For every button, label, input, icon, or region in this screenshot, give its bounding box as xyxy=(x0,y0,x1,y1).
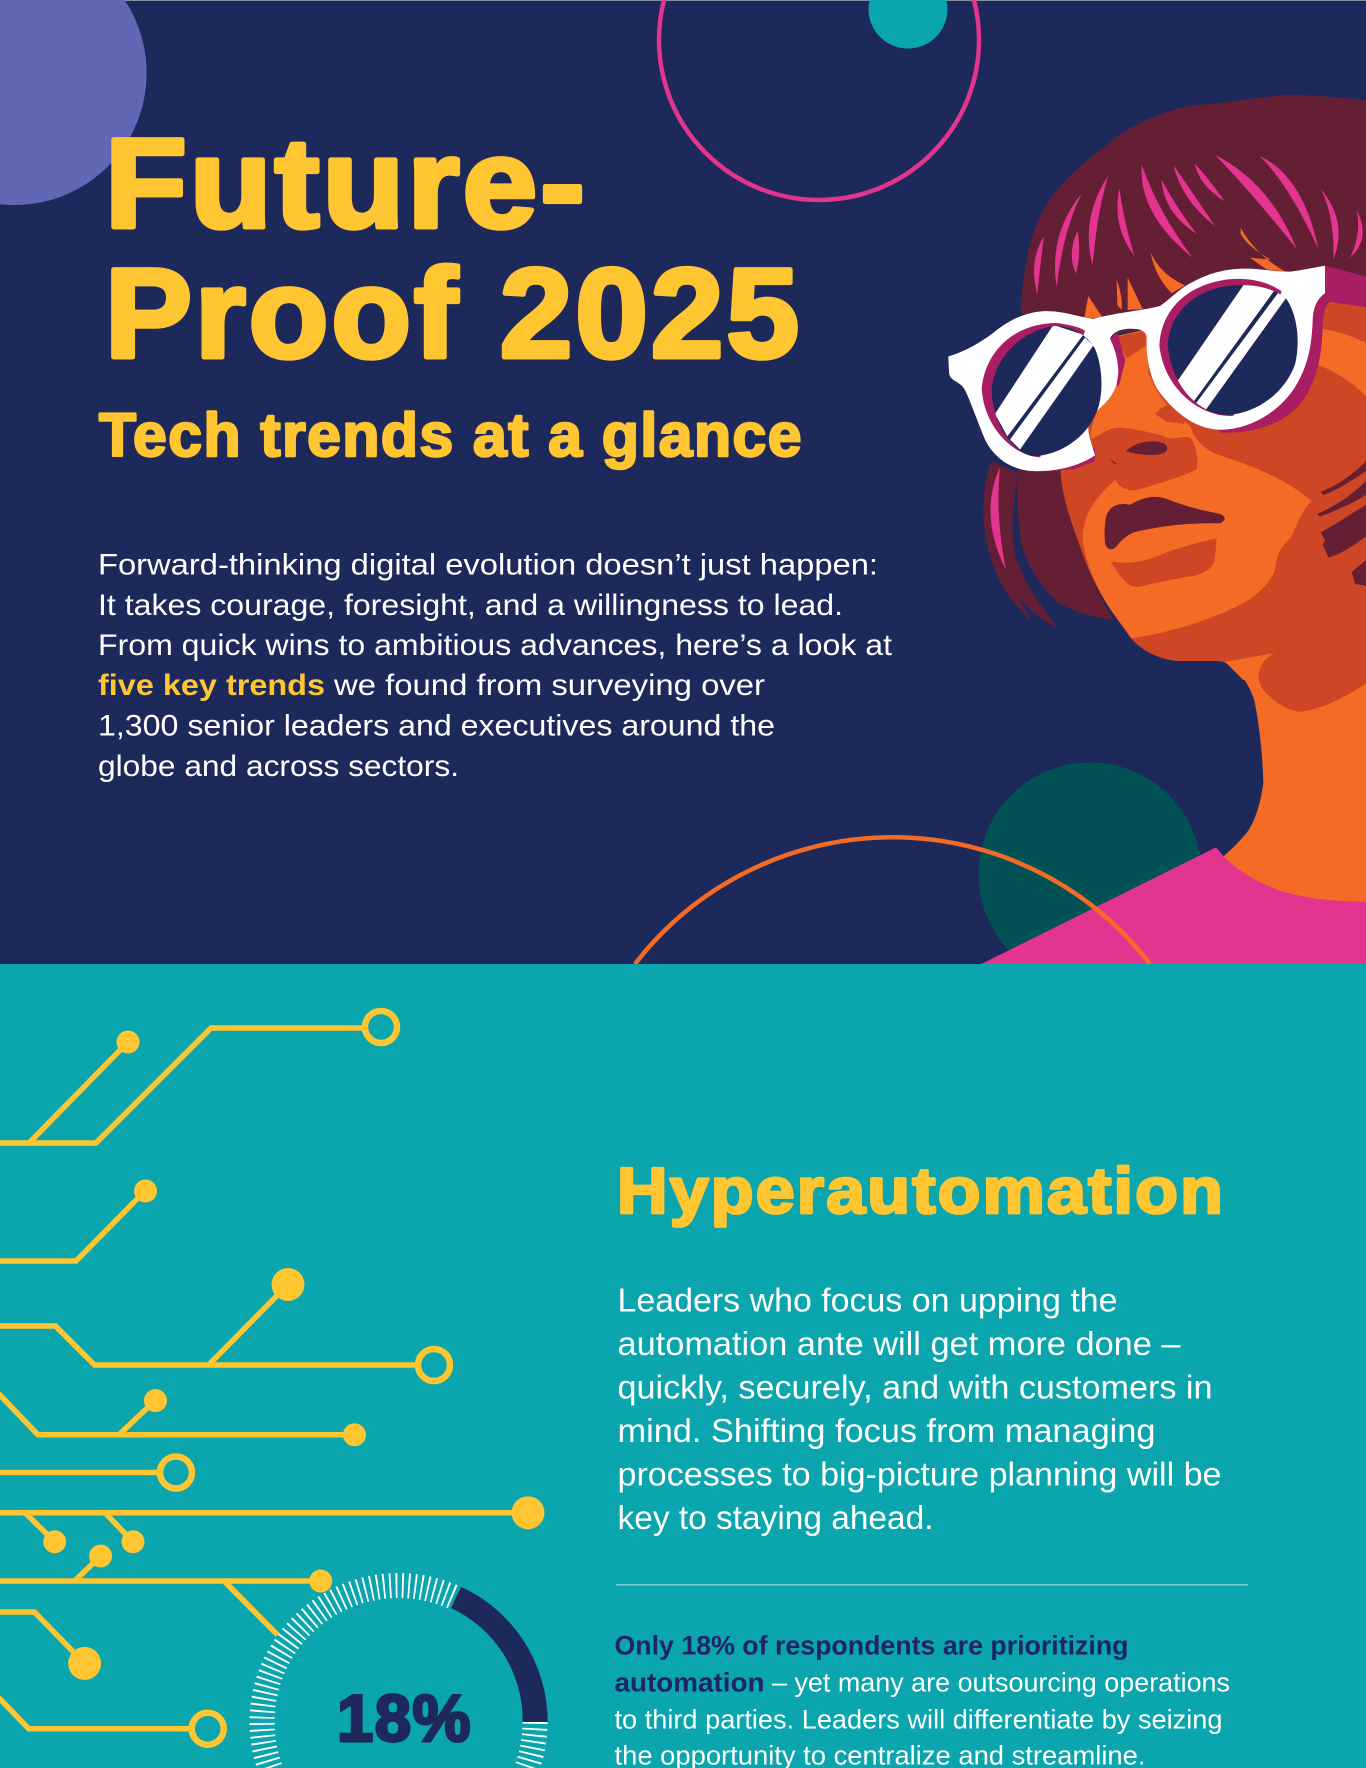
panel: hero background xyxy=(0,0,1366,964)
illustration: woman with sunglasses xyxy=(948,95,1366,965)
hair strands xyxy=(990,155,1363,570)
decorative circle: dark green xyxy=(978,762,1202,986)
stat text: Only 18% of respondents are prioritizing xyxy=(614,1631,1128,1661)
left lens xyxy=(982,323,1085,457)
intro text: five key trends xyxy=(98,669,325,702)
decorative circle: purple xyxy=(0,0,147,205)
donut chart: 18% xyxy=(262,1586,548,1768)
glasses shade xyxy=(1047,266,1366,471)
nostrils xyxy=(1126,441,1167,455)
hair xyxy=(1021,95,1366,337)
hyperautomation body text xyxy=(618,1282,1222,1536)
top edge line xyxy=(0,0,1366,1)
skin xyxy=(1061,297,1366,680)
intro text: Forward-thinking digital evolution doesn’t just happen: xyxy=(98,548,878,582)
neck and shirt xyxy=(980,657,1366,965)
right lens xyxy=(1159,279,1282,416)
title xyxy=(105,112,802,384)
intro text xyxy=(98,548,893,783)
circuit graphic xyxy=(0,1011,544,1745)
hyperautomation body text: key to staying ahead. xyxy=(618,1499,934,1536)
donut value: 18% xyxy=(337,1681,472,1755)
hyperautomation body text: mind. Shifting focus from managing xyxy=(618,1412,1156,1449)
intro text: It takes courage, foresight, and a willingness to lead. xyxy=(98,589,843,622)
stat text: to third parties. Leaders will differentiate by seizing xyxy=(614,1705,1222,1735)
panel: hyperautomation background xyxy=(0,964,1366,1768)
lips xyxy=(1105,497,1225,549)
orange bits through hair xyxy=(1084,228,1285,319)
stat text xyxy=(614,1631,1230,1768)
nose shadow xyxy=(1090,427,1197,490)
title: Proof 2025 xyxy=(105,242,802,384)
decorative circle: teal xyxy=(868,0,948,48)
head xyxy=(948,95,1366,680)
hyperautomation body text: quickly, securely, and with customers in xyxy=(618,1368,1212,1405)
decorative ring: pink xyxy=(659,0,979,200)
glasses frame xyxy=(948,266,1325,471)
intro text: From quick wins to ambitious advances, here’s a look at xyxy=(98,629,893,662)
hyperautomation body text: Leaders who focus on upping the xyxy=(618,1282,1118,1318)
hyperautomation body text: automation ante will get more done – xyxy=(618,1325,1181,1362)
intro text: 1,300 senior leaders and executives around the xyxy=(98,710,775,742)
intro text: globe and across sectors. xyxy=(98,750,459,783)
stat text: automation xyxy=(614,1668,764,1698)
decorative arc: orange xyxy=(635,837,1150,964)
stat text: – yet many are outsourcing operations xyxy=(772,1668,1230,1698)
hyperautomation body text: processes to big-picture planning will be xyxy=(618,1455,1222,1492)
subtitle: Tech trends at a glance xyxy=(99,401,803,469)
intro text: we found from surveying over xyxy=(333,669,765,702)
title: Future- xyxy=(105,112,588,254)
sideburn tufts xyxy=(1317,461,1366,586)
heading: Hyperautomation: Hyperautomation xyxy=(617,1154,1225,1227)
